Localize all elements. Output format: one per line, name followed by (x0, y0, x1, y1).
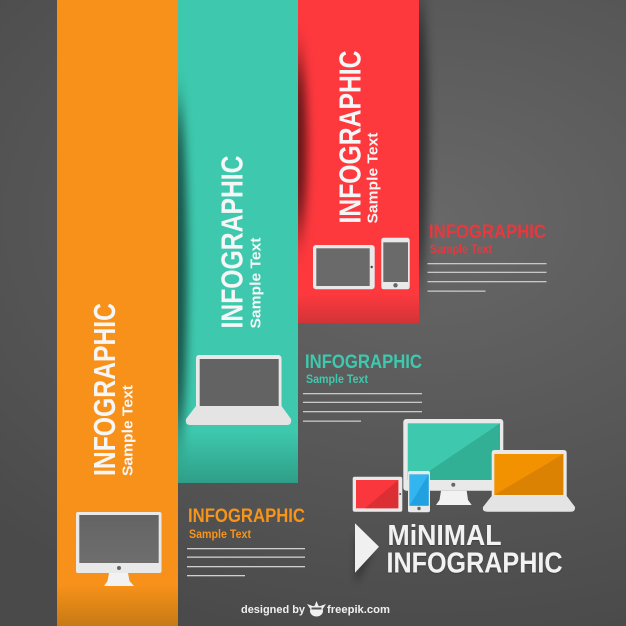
vertical heading: teal column: INFOGRAPHIC (215, 156, 250, 328)
footer credit (241, 601, 390, 616)
text lines: teal (303, 393, 422, 422)
icon: colored desktop (403, 419, 503, 505)
text lines: red (428, 263, 546, 292)
text block: teal (303, 351, 422, 422)
vertical subheading: teal column: Sample Text (249, 237, 265, 328)
icon: phone (381, 238, 410, 289)
subheading: teal: Sample Text (306, 372, 368, 386)
icon: laptop (186, 355, 291, 425)
text block: red (428, 221, 546, 292)
footer credit: freepik.com (327, 604, 390, 616)
panel: red column (289, 0, 428, 323)
vertical heading: orange column: INFOGRAPHIC (87, 303, 122, 476)
icon: freepik mascot (307, 601, 326, 616)
text block: orange (187, 505, 305, 576)
title: INFOGRAPHIC (386, 548, 563, 580)
footer credit: designed by (241, 604, 306, 616)
vertical heading: red column: INFOGRAPHIC (332, 50, 368, 224)
subheading: red: Sample Text (430, 242, 492, 256)
panel: orange column (57, 0, 178, 626)
subheading: orange: Sample Text (189, 527, 251, 541)
vertical subheading: red column: Sample Text (366, 132, 382, 224)
panel: teal column (169, 0, 298, 483)
icon: colored laptop (483, 450, 575, 512)
icon: colored tablet (353, 477, 402, 512)
title: MiNIMAL (388, 520, 502, 552)
icon: desktop monitor (76, 512, 162, 586)
heading: teal: INFOGRAPHIC (305, 351, 422, 373)
title (386, 520, 563, 580)
text lines: orange (187, 548, 305, 576)
heading: orange: INFOGRAPHIC (188, 505, 305, 527)
icon: colored phone (408, 471, 430, 512)
heading: red: INFOGRAPHIC (429, 221, 546, 243)
arrow: play triangle (355, 523, 379, 585)
icon: tablet (313, 245, 375, 289)
vertical subheading: orange column: Sample Text (120, 385, 136, 476)
